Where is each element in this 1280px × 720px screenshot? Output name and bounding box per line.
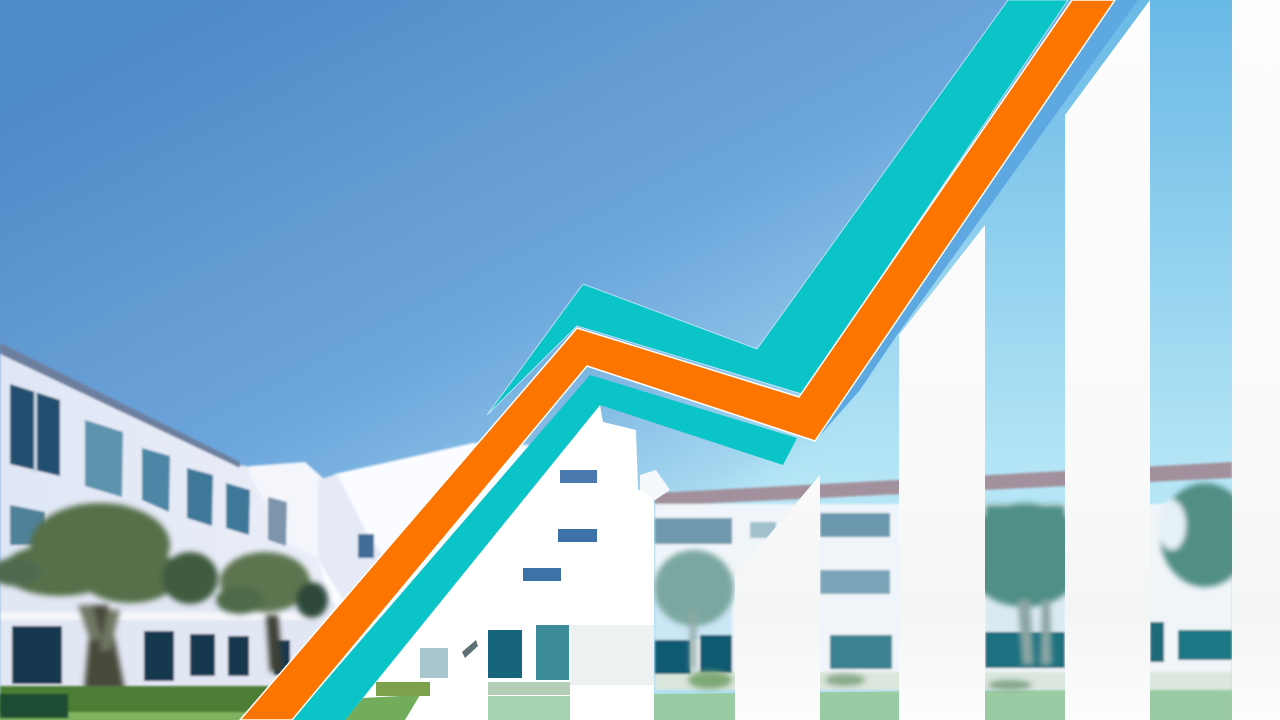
chart line: teal upper segment	[487, 0, 1068, 415]
right trees	[654, 483, 1250, 690]
lower windows	[12, 626, 290, 684]
left building	[0, 343, 530, 700]
lawn and hedge	[0, 686, 1280, 720]
line behind: blue shadow band	[815, 0, 1138, 441]
bar 3	[735, 475, 820, 720]
bar 6	[1232, 0, 1280, 720]
bar 2 and white tower	[345, 405, 670, 720]
bar 4	[899, 225, 985, 720]
trees and hedge	[0, 503, 328, 690]
bar chart: white translucent bars	[345, 0, 1280, 720]
chart line: teal lower segment	[292, 375, 797, 720]
chart line: orange main	[240, 0, 1115, 720]
lower floor band	[0, 585, 320, 690]
bar 1	[405, 640, 488, 720]
bar 5	[1065, 0, 1150, 720]
right building	[655, 462, 1232, 690]
upper windows	[10, 384, 287, 546]
